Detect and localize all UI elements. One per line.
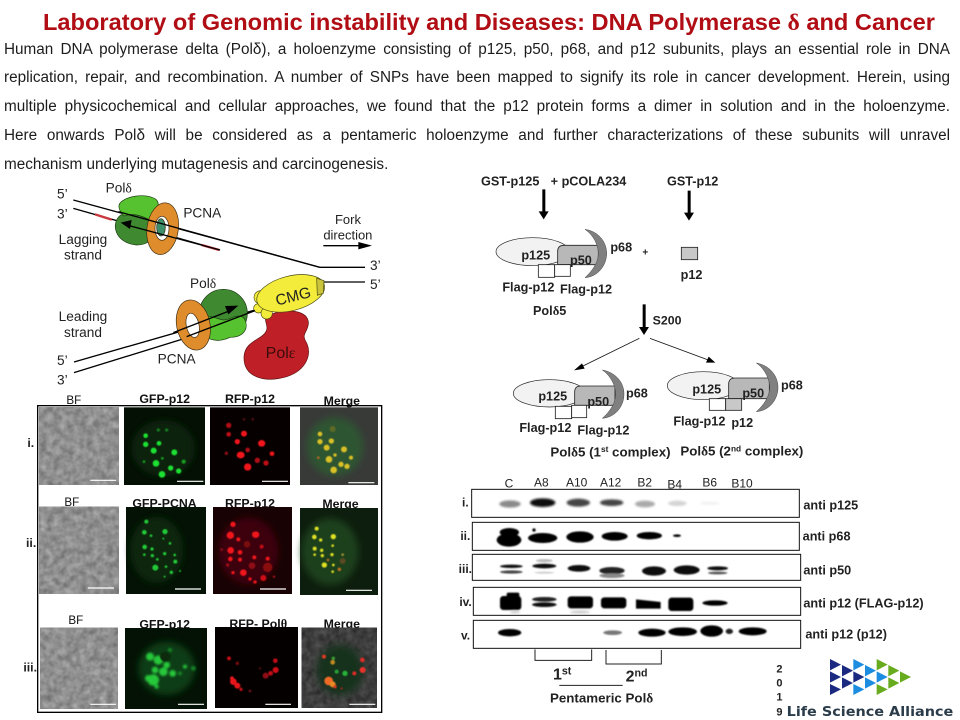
lane labels: A8	[534, 475, 549, 489]
1st and 2nd labels: nd	[635, 667, 648, 679]
blot row labels: iv.	[459, 595, 472, 609]
column labels: BF	[68, 614, 83, 627]
Pol delta 5 complex	[496, 229, 632, 318]
second complex: complex)	[741, 444, 803, 459]
BF i	[39, 407, 119, 485]
replication fork diagram	[57, 180, 381, 387]
second complex: p125	[692, 383, 721, 397]
diagram labels: Polδ	[106, 180, 132, 195]
column labels: Merge	[324, 394, 360, 408]
body text: replication, repair, and recombination. A number of SNPs have been mapped to signify its role in cancer development. Herein, using	[4, 69, 950, 86]
diagram labels: PCNA	[158, 352, 196, 367]
diagram labels: 5’	[370, 277, 381, 292]
blot i label: anti p125	[803, 498, 858, 512]
year	[776, 663, 782, 718]
diagram labels: 5’	[57, 353, 68, 368]
reconstitution schematic	[481, 174, 803, 459]
blot v label: anti p12 (p12)	[805, 628, 887, 642]
pentameric label: Pentameric Polδ	[550, 691, 653, 706]
column labels: RFP-p12	[225, 497, 275, 511]
first complex: p68	[626, 387, 648, 401]
blot row labels: iii.	[459, 562, 472, 576]
GFP ii	[126, 507, 206, 594]
diagram labels: Polε	[266, 345, 296, 362]
lane labels: A10	[566, 475, 588, 489]
second complex: Polδ5 (2	[680, 444, 731, 459]
western blots	[459, 475, 953, 720]
Merge ii	[300, 508, 378, 595]
fork direction arrow	[323, 244, 359, 248]
blot iii label: anti p50	[803, 563, 851, 577]
blot iii p50	[472, 554, 851, 580]
diagram labels: 3’	[370, 258, 381, 273]
year: 9	[776, 706, 782, 718]
column labels: BF	[64, 496, 79, 509]
diagram labels: Leading	[59, 309, 107, 324]
arrows down	[539, 189, 694, 335]
blot row labels	[459, 496, 472, 642]
RFP i	[210, 407, 290, 485]
column labels: BF	[66, 394, 81, 407]
Life Science Alliance logo	[787, 659, 953, 720]
first complex: complex)	[608, 444, 671, 459]
plus sign: +	[642, 247, 648, 258]
top labels: + pCOLA234	[551, 174, 626, 188]
1st and 2nd labels: st	[562, 665, 572, 677]
GFP i	[124, 407, 205, 485]
diagram labels: strand	[64, 247, 102, 262]
column labels: GFP-p12	[139, 618, 190, 632]
Pol delta 5 complex: Flag-p12	[560, 283, 612, 297]
row labels	[23, 436, 37, 675]
GFP iii	[125, 628, 207, 709]
fraction brackets	[535, 649, 661, 664]
second complex: p50	[742, 387, 764, 401]
BF ii	[39, 507, 119, 594]
lane labels: C	[505, 476, 514, 490]
blot ii label: anti p68	[803, 529, 850, 543]
second complex: nd	[731, 443, 741, 453]
1st and 2nd labels	[553, 665, 648, 686]
blot row labels: i.	[462, 496, 469, 510]
first complex: p125	[538, 390, 567, 404]
first complex: Flag-p12	[519, 421, 571, 435]
RFP ii	[213, 507, 292, 594]
1st and 2nd labels: 2	[626, 669, 635, 686]
year: 2	[776, 663, 782, 675]
S200 label: S200	[653, 313, 682, 327]
row labels: iii.	[23, 661, 37, 675]
second complex: p12	[731, 416, 753, 430]
diagram labels: Fork	[335, 212, 361, 227]
row iii micrographs	[40, 627, 377, 709]
blot row labels: v.	[461, 628, 470, 642]
body text: multiple physicochemical and cellular approaches, we found that the p12 protein forms a dimer in solution and in the holoenzyme.	[4, 98, 950, 115]
Pol delta 5 complex: p50	[570, 253, 592, 267]
diagram labels: 3’	[57, 207, 68, 222]
p12 subunit	[681, 247, 702, 282]
diagram labels: Polδ	[190, 276, 216, 291]
diagram labels: direction	[323, 227, 372, 242]
column labels	[64, 392, 360, 632]
microscopy figure	[23, 392, 382, 712]
diagram labels: Lagging	[59, 232, 107, 247]
body text	[4, 40, 950, 173]
top labels: GST-p125	[481, 174, 539, 188]
Okazaki fragments	[95, 214, 219, 250]
lagging strand overlay	[118, 212, 320, 267]
title: Laboratory of Genomic instability and Diseases: DNA Polymerase δ and Cancer	[43, 9, 935, 36]
Pol epsilon	[244, 311, 309, 379]
year: 0	[776, 678, 782, 690]
Pol delta 5 complex: p68	[610, 240, 632, 254]
blot i p125	[472, 489, 858, 517]
first complex: Polδ5 (1	[550, 444, 601, 459]
leading PCNA	[172, 297, 215, 353]
lagging Pol delta	[115, 196, 158, 245]
1st and 2nd labels: 1	[553, 667, 562, 684]
top labels	[481, 174, 718, 188]
lane labels	[505, 475, 753, 492]
CMG helicase	[253, 268, 328, 319]
column labels: RFP-p12	[225, 392, 275, 406]
column labels: Merge	[322, 497, 359, 511]
Life Science Alliance logo: Life Science Alliance	[787, 705, 953, 720]
lane labels: B10	[731, 476, 753, 490]
scale bars	[88, 480, 375, 704]
Pol delta 5 complex: p125	[521, 249, 550, 263]
blot iv p12 FLAG	[473, 587, 924, 615]
first complex: st	[601, 444, 609, 454]
second complex: p68	[781, 379, 803, 393]
blot ii p68	[472, 522, 850, 550]
first complex	[513, 370, 671, 459]
column labels: GFP-p12	[139, 392, 190, 406]
body text: mechanism underlying mutagenesis and carcinogenesis.	[4, 156, 388, 173]
Merge iii	[302, 628, 377, 708]
lane labels: B6	[702, 475, 717, 489]
row ii micrographs	[39, 507, 378, 595]
row labels: ii.	[26, 536, 36, 550]
p12 subunit: p12	[681, 268, 702, 282]
Pol delta 5 complex: Flag-p12	[502, 281, 554, 295]
leading strand overlay	[173, 309, 255, 337]
Pol delta 5 complex: Polδ5	[533, 304, 566, 318]
lane labels: A12	[600, 475, 622, 489]
blot row labels: ii.	[460, 529, 470, 543]
first complex: p50	[587, 395, 609, 409]
leading strand DNA	[74, 282, 365, 373]
diagram labels: 3’	[57, 372, 68, 387]
lane labels: B4	[667, 478, 682, 492]
BF iii	[40, 628, 118, 709]
frame	[38, 406, 382, 712]
body text: Here onwards Polδ will be considered as a pentameric holoenzyme and further characterizations of these subunits will unravel	[4, 127, 950, 144]
column labels: Merge	[324, 617, 360, 631]
blot v p12	[473, 620, 887, 648]
RFP iii	[215, 627, 298, 708]
row i micrographs	[39, 407, 378, 485]
leading Pol delta	[199, 289, 247, 340]
body text: Human DNA polymerase delta (Polδ), a holoenzyme consisting of p125, p50, p68, and p12 subunits, plays an essential role in DNA	[4, 40, 950, 58]
diagram labels: strand	[64, 325, 102, 340]
second complex: Flag-p12	[673, 415, 725, 429]
row labels: i.	[27, 436, 34, 450]
second complex	[667, 363, 803, 459]
column labels: RFP- Polθ	[229, 617, 287, 631]
blot iv label: anti p12 (FLAG-p12)	[803, 596, 924, 610]
branch arrows	[574, 338, 715, 370]
year: 1	[776, 692, 782, 704]
lagging PCNA	[144, 201, 182, 257]
pentameric line	[559, 684, 623, 687]
diagram labels: 5’	[57, 187, 68, 202]
lane labels: B2	[637, 475, 652, 489]
diagram labels: CMG	[274, 284, 313, 309]
diagram labels: PCNA	[183, 205, 222, 220]
column labels: GFP-PCNA	[132, 497, 197, 511]
top labels: GST-p12	[667, 174, 718, 188]
Merge i	[300, 407, 378, 485]
lagging strand DNA	[73, 200, 365, 267]
diagram labels	[57, 180, 381, 387]
first complex: Flag-p12	[577, 424, 629, 438]
